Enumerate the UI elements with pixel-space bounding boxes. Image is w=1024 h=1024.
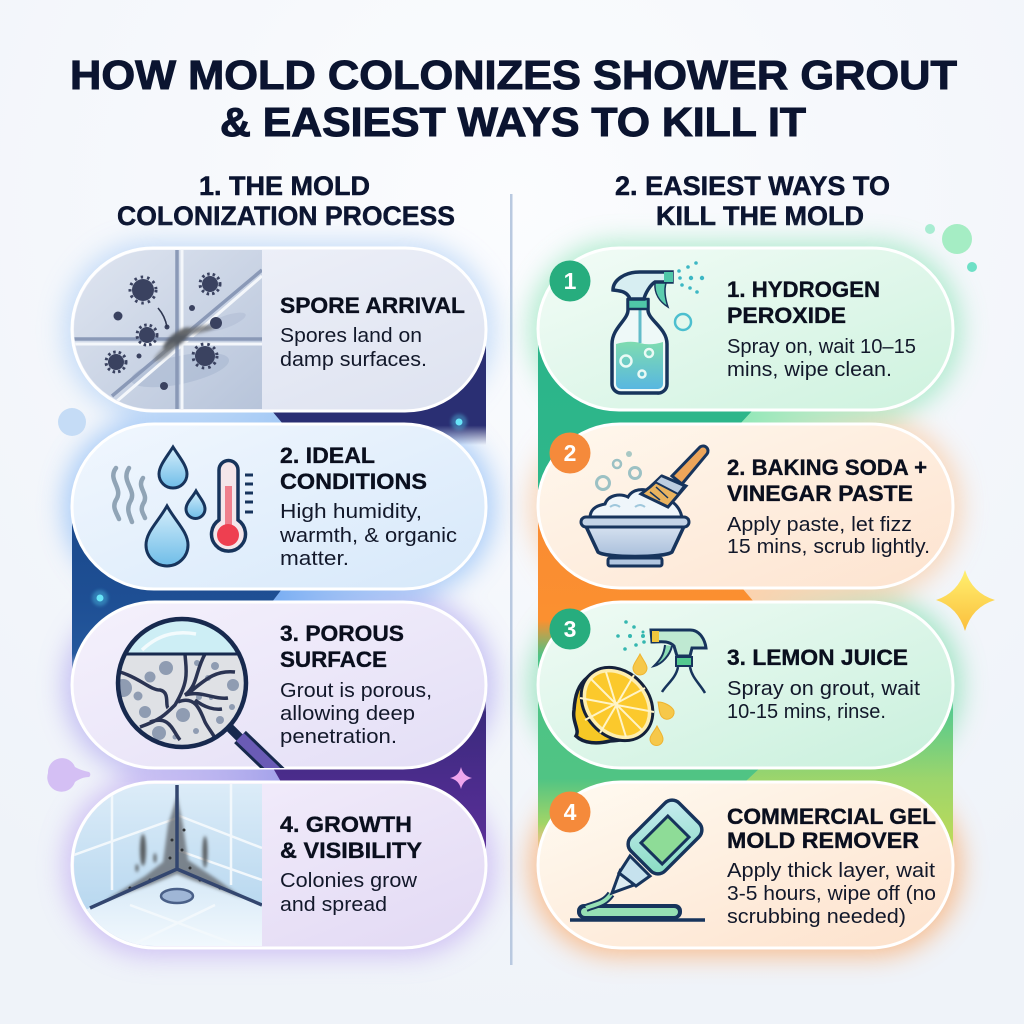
panel: hydrogen peroxide <box>538 248 953 410</box>
text: lemon juice <box>727 645 920 723</box>
text: baking soda and vinegar paste <box>727 455 930 558</box>
panel: growth and visibility <box>72 782 486 948</box>
text: growth and visibility: & VISIBILITY <box>280 838 422 863</box>
text: lemon juice: 3. LEMON JUICE <box>727 645 908 670</box>
icon: moldy shower corner <box>74 784 262 946</box>
title <box>70 52 957 145</box>
heading: colonization process: 1. THE MOLD <box>199 171 370 201</box>
text: porous surface: penetration. <box>280 725 397 748</box>
icon: bowl of paste with brush <box>581 446 708 566</box>
text: hydrogen peroxide: PEROXIDE <box>727 303 846 328</box>
heading: ways to kill <box>615 171 890 231</box>
icon: magnifier over porous grout <box>116 616 284 768</box>
text: growth and visibility <box>280 812 422 916</box>
text: baking soda and vinegar paste: VINEGAR PASTE <box>727 481 913 506</box>
panel: porous surface <box>72 602 486 785</box>
icon: gel bottle and bead <box>570 796 706 920</box>
decorative bubbles and sparkles <box>47 224 995 792</box>
badge 2: 2 <box>564 440 576 466</box>
text: porous surface <box>280 621 432 748</box>
text: ideal conditions: High humidity, <box>280 500 422 523</box>
text: growth and visibility: and spread <box>280 893 387 916</box>
panel: baking soda and vinegar paste <box>538 424 953 588</box>
text: baking soda and vinegar paste: 15 mins, scrub lightly. <box>727 535 930 558</box>
text: commercial gel mold remover: MOLD REMOVER <box>727 828 919 853</box>
badge 3: 3 <box>564 616 576 642</box>
heading: ways to kill: KILL THE MOLD <box>656 201 864 231</box>
right column glow and connector band <box>530 242 961 956</box>
text: ideal conditions: CONDITIONS <box>280 469 427 494</box>
text: porous surface: SURFACE <box>280 647 387 672</box>
text: ideal conditions: warmth, & organic <box>279 524 457 547</box>
text: ideal conditions <box>279 443 457 570</box>
panel: spore arrival <box>72 248 486 411</box>
panel: commercial gel mold remover <box>538 782 953 948</box>
text: baking soda and vinegar paste: Apply paste, let fizz <box>727 513 912 536</box>
text: ideal conditions: 2. IDEAL <box>280 443 375 468</box>
text: porous surface: Grout is porous, <box>280 679 432 702</box>
badge 1 <box>550 260 590 302</box>
text: ideal conditions: matter. <box>280 547 349 570</box>
text: spore arrival: SPORE ARRIVAL <box>280 293 465 318</box>
text: growth and visibility: Colonies grow <box>280 869 417 892</box>
heading: ways to kill: 2. EASIEST WAYS TO <box>615 171 890 201</box>
text: commercial gel mold remover: 3-5 hours, wipe off (no <box>727 882 936 905</box>
heading: colonization process <box>117 171 455 231</box>
icon: steam, droplets and thermometer <box>113 447 253 566</box>
text: baking soda and vinegar paste: 2. BAKING SODA + <box>727 455 927 480</box>
heading: colonization process: COLONIZATION PROCESS <box>117 201 455 231</box>
text: spore arrival <box>280 293 465 371</box>
text: growth and visibility: 4. GROWTH <box>280 812 412 837</box>
text: hydrogen peroxide: 1. HYDROGEN <box>727 277 880 302</box>
text: hydrogen peroxide: Spray on, wait 10–15 <box>727 335 916 358</box>
left column glow and connector band <box>64 242 494 956</box>
badge 3 <box>550 608 590 650</box>
panel: lemon juice <box>538 602 953 768</box>
text: porous surface: allowing deep <box>280 702 415 725</box>
text: commercial gel mold remover: COMMERCIAL GEL <box>727 804 936 829</box>
panel: ideal conditions <box>72 424 486 589</box>
text: hydrogen peroxide <box>727 277 916 381</box>
badge 1: 1 <box>564 268 577 294</box>
icon: lemon and spray head <box>566 620 706 755</box>
badge 4 <box>550 792 590 832</box>
text: porous surface: 3. POROUS <box>280 621 404 646</box>
text: commercial gel mold remover: Apply thick layer, wait <box>727 859 935 882</box>
icon: grout with spores <box>72 248 262 411</box>
text: lemon juice: Spray on grout, wait <box>727 677 920 700</box>
icon: spray bottle <box>612 261 704 393</box>
badge 2 <box>550 432 590 474</box>
text: spore arrival: damp surfaces. <box>280 348 427 371</box>
text: spore arrival: Spores land on <box>280 324 422 347</box>
badge 4: 4 <box>564 799 577 825</box>
title: HOW MOLD COLONIZES SHOWER GROUT <box>70 52 957 98</box>
text: hydrogen peroxide: mins, wipe clean. <box>727 358 892 381</box>
text: lemon juice: 10-15 mins, rinse. <box>727 700 886 723</box>
text: commercial gel mold remover <box>727 804 936 928</box>
title: & EASIEST WAYS TO KILL IT <box>220 99 806 145</box>
text: commercial gel mold remover: scrubbing needed) <box>727 905 906 928</box>
